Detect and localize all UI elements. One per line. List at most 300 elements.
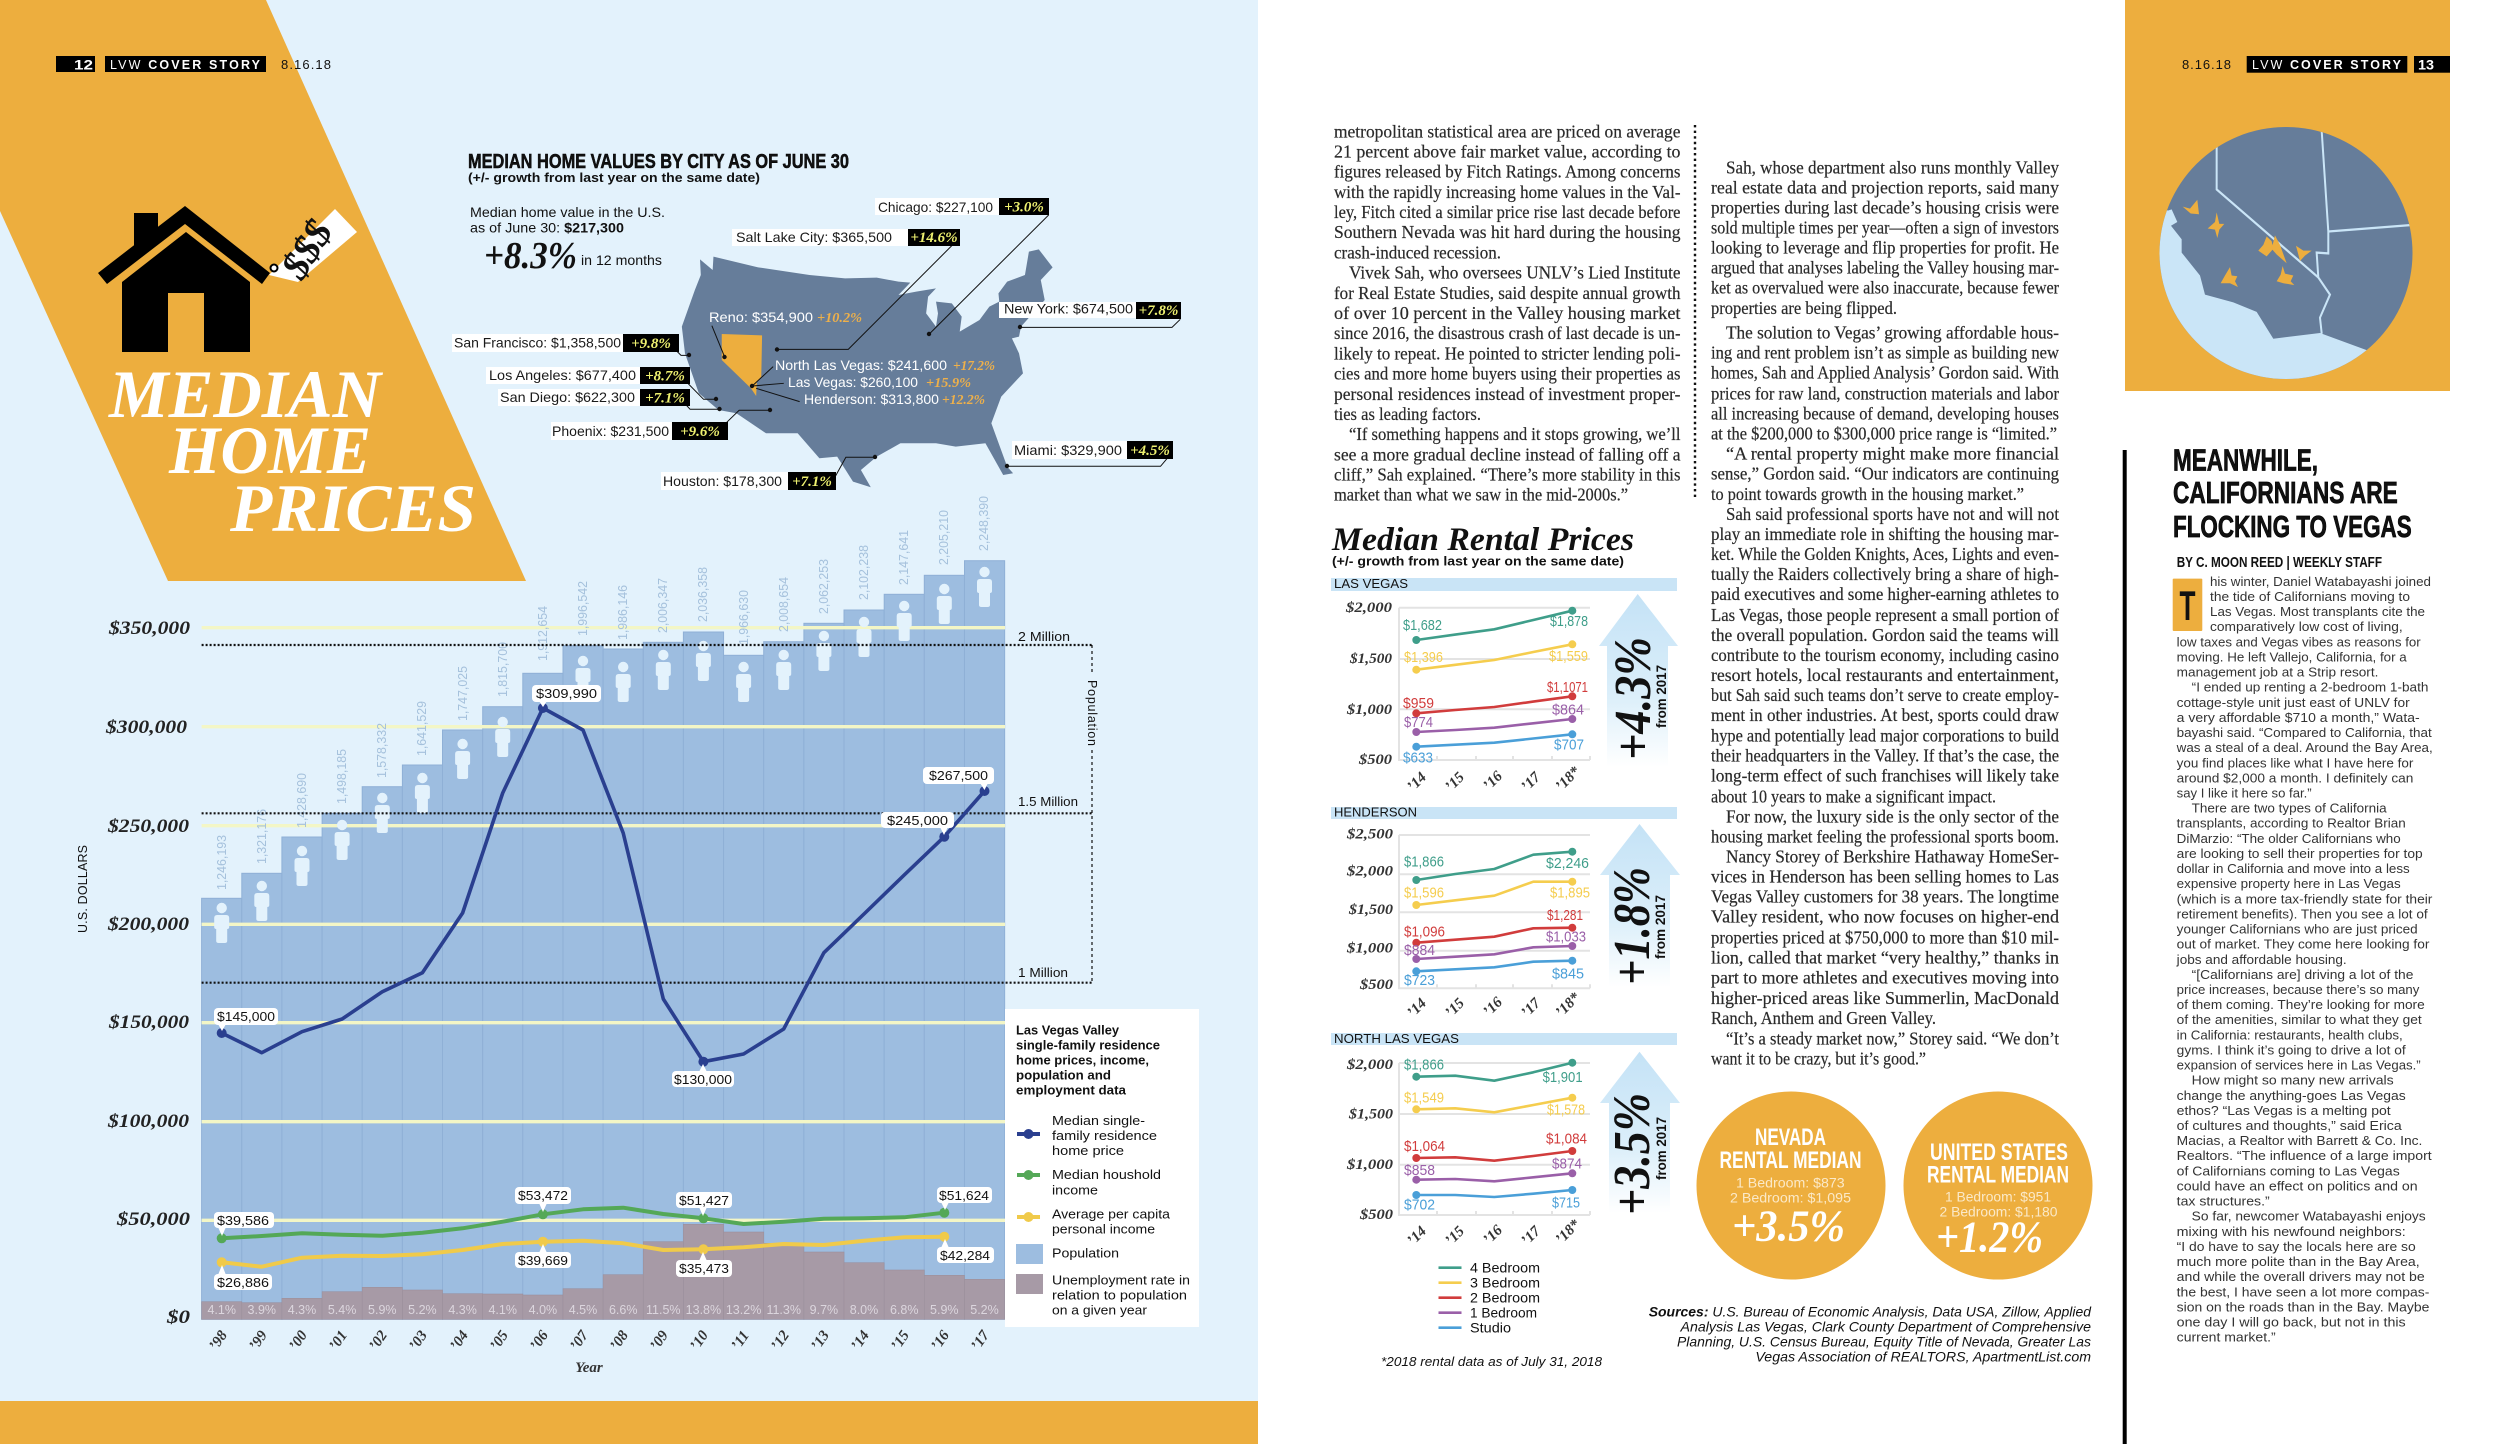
text block: sidebar article: you find places like what I have here for	[2177, 755, 2414, 770]
population values: 2,036,358	[695, 567, 710, 622]
text block: article column 2: about 10 years to make a significant impact.	[1711, 786, 1996, 806]
text block: sidebar article: “[Californians are] driving a lot of the	[2192, 967, 2413, 982]
callout: United States rental median: 1 Bedroom: $951	[1945, 1189, 2051, 1205]
population values: 2,006,347	[655, 578, 670, 633]
header: page 13 tab: 8.16.18	[2182, 57, 2231, 72]
chart: Las Vegas rentals: $864	[1552, 702, 1584, 719]
heading: Median Rental Prices: (+/- growth from last year on the same date)	[1332, 555, 1624, 569]
text block: sources	[1649, 1304, 2092, 1365]
chart: Las Vegas Valley home prices, income, population, unemployment	[76, 496, 1099, 1376]
callout: Nevada rental median: NEVADA	[1755, 1124, 1826, 1151]
callout: United States rental median: 2 Bedroom: $1,180	[1940, 1204, 2058, 1220]
value callouts: $245,000	[887, 813, 948, 828]
text block: US median home value: +8.3%	[484, 235, 577, 277]
text block: sidebar article: price increases, because there’s so many	[2177, 982, 2420, 997]
legend: home price chart: Median houshold	[1052, 1167, 1161, 1182]
chart: North Las Vegas rentals: NORTH LAS VEGAS	[1334, 1031, 1459, 1046]
y axis labels: $0	[166, 1307, 191, 1328]
y axis labels: $250,000	[107, 816, 190, 837]
text block: article column 2: Valley resident, who now focuses on higher-end	[1711, 907, 2059, 927]
chart: North Las Vegas rentals: $874	[1552, 1156, 1582, 1173]
text block: sidebar article: could have an effect on politics and on	[2177, 1178, 2418, 1194]
callout: Salt Lake City: Salt Lake City: $365,500	[736, 229, 892, 245]
callout: Nevada rental median: +3.5%	[1732, 1202, 1845, 1251]
chart: Las Vegas rentals: $1,559	[1549, 648, 1588, 665]
legend: home price chart: income	[1052, 1182, 1098, 1197]
legend: home price chart: family residence	[1052, 1128, 1157, 1143]
chart: Henderson rentals: $1,000	[1346, 941, 1394, 957]
unemployment percentages: 5.2%	[408, 1303, 437, 1317]
population reference lines	[202, 629, 1099, 983]
callout: Nevada rental median	[1696, 1092, 1886, 1280]
text block: article column 1: since 2016, the disastrous crash of last decade is un-	[1334, 323, 1680, 343]
value callouts: $42,284	[940, 1248, 990, 1263]
text block: article column 2: For now, the luxury side is the only sector of the	[1726, 806, 2059, 826]
chart: North Las Vegas rentals: ’15	[1442, 1223, 1468, 1249]
x axis labels: ’14	[848, 1328, 873, 1353]
legend: rental chart	[1438, 1260, 1540, 1336]
arrow: North Las Vegas growth	[1600, 1052, 1680, 1215]
text block: article column 1: cies and more home buyers using their properties as	[1334, 364, 1680, 384]
text block: sidebar article: Realtors. “The influence of a large import	[2177, 1148, 2432, 1163]
x axis labels: ’11	[729, 1328, 753, 1353]
population values: 2,205,210	[936, 510, 951, 565]
callout: New York: New York: $674,500	[1004, 300, 1133, 316]
text block: article column 2: Las Vegas, those people represent a small portion of	[1711, 605, 2059, 625]
text block: sidebar article: ethos? “Las Vegas is a melting pot	[2177, 1103, 2391, 1118]
chart: North Las Vegas rentals: $1,000	[1346, 1157, 1394, 1173]
text block: article column 1: ties as leading factors.	[1334, 404, 1481, 424]
text block: article column 2: looking to leverage and flip properties for profit. He	[1711, 237, 2059, 257]
text block: sources: Vegas Association of REALTORS, ApartmentList.com	[1755, 1349, 2091, 1365]
text block: sources: Planning, U.S. Census Bureau, Equity Title of Nevada, Greater Las	[1677, 1334, 2091, 1350]
callout: Houston: Houston: $178,300	[663, 473, 782, 489]
text block: sidebar article: comparatively low cost of living,	[2210, 619, 2403, 634]
unemployment percentages: 13.2%	[726, 1303, 761, 1317]
callout: United States rental median: RENTAL MEDIAN	[1927, 1162, 2069, 1189]
text block: sidebar article: expansion of services here in Las Vegas.”	[2177, 1058, 2421, 1073]
chart: Henderson rentals: HENDERSON	[1334, 804, 1417, 820]
chart: Henderson rentals: $1,866	[1404, 854, 1444, 871]
x axis labels: ’01	[326, 1328, 351, 1353]
arrow: Las Vegas growth: from 2017	[1653, 665, 1669, 728]
text block: article column 2: lion, called that market “very healthy,” thanks in	[1711, 947, 2059, 967]
unemployment percentages: 4.3%	[288, 1303, 316, 1317]
icon: house with price tag	[98, 206, 357, 352]
unemployment percentages: 6.8%	[890, 1303, 918, 1317]
unemployment percentages: 11.3%	[766, 1303, 801, 1317]
chart: Henderson rentals: $1,096	[1404, 924, 1445, 941]
x axis labels: ’07	[567, 1328, 592, 1353]
x axis labels: ’16	[928, 1328, 953, 1353]
chart: North Las Vegas rentals: $500	[1359, 1207, 1394, 1223]
text block: sidebar article: “I ended up renting a 2-bedroom 1-bath	[2192, 680, 2428, 695]
text block: article column 2: Nancy Storey of Berkshire Hathaway HomeSer-	[1726, 846, 2059, 866]
person icons	[214, 567, 992, 943]
labels: Nevada cities: +12.2%	[942, 393, 985, 408]
chart: Las Vegas rentals: ’16	[1480, 768, 1506, 794]
x axis labels: ’05	[487, 1328, 512, 1353]
text block: sidebar article: a very affordable $710 a month,” Wata-	[2177, 710, 2420, 725]
chart: North Las Vegas rentals: ’16	[1480, 1222, 1506, 1248]
chart: North Las Vegas rentals: $715	[1552, 1194, 1580, 1211]
text block: article column 2: part to more athletes and executives moving into	[1711, 968, 2059, 988]
chart: North Las Vegas rentals: ’18*	[1553, 1216, 1584, 1248]
panel: orange map block	[2125, 0, 2450, 391]
population values: 2,248,390	[976, 496, 991, 551]
x axis labels: ’02	[366, 1328, 391, 1353]
arrow: Las Vegas growth: +4.3%	[1605, 637, 1662, 760]
text block: US median home value	[470, 204, 665, 277]
icon: house with price tag: $$$	[271, 211, 342, 287]
text block: article column 1: “If something happens and it stops growing, we’ll	[1349, 424, 1680, 444]
text block: article column 2: homes, Sah and Applied Analysis’ Gordon said. With	[1711, 362, 2059, 382]
arrow: North Las Vegas growth: +3.5%	[1604, 1093, 1661, 1215]
text block: article column 2: all increasing because of demand, developing houses	[1711, 403, 2059, 423]
text block: article column 2: ket as overvalued were also inaccurate, because fewer	[1711, 277, 2059, 297]
legend: home price chart: Las Vegas Valley	[1016, 1022, 1120, 1037]
y axis labels: $200,000	[107, 914, 190, 935]
unemployment percentages: 8.0%	[850, 1303, 878, 1317]
unemployment percentages: 13.8%	[686, 1303, 721, 1317]
text block: article column 1: Southern Nevada was hit hard during the housing	[1334, 222, 1680, 242]
text block: sidebar article: in California: restaurants, health clubs,	[2177, 1027, 2403, 1042]
callout: Chicago: Chicago: $227,100	[878, 199, 993, 215]
text block: article column 2: but Sah said such teams don’t serve to create employ-	[1711, 685, 2059, 705]
population values	[214, 496, 991, 890]
unemployment percentages	[207, 1303, 999, 1317]
y axis labels: $300,000	[105, 717, 188, 738]
callout: New York: +7.8%	[1139, 303, 1178, 319]
chart: Henderson rentals: $1,500	[1348, 902, 1394, 918]
text block: article column 2: ment in other industries. At best, sports could draw	[1711, 705, 2059, 725]
callout: San Francisco: +9.8%	[631, 336, 671, 352]
value callouts	[214, 685, 994, 1290]
x axis labels: ’12	[768, 1328, 793, 1353]
text block: sidebar article: retirement benefits). Then you see a lot of	[2177, 906, 2428, 921]
value callouts: $53,472	[518, 1188, 568, 1203]
text block: sidebar article: dollar in California and move into a less	[2177, 861, 2410, 876]
unemployment percentages: 5.4%	[328, 1303, 356, 1317]
text block: sidebar article: are looking to sell their properties for top	[2177, 846, 2423, 861]
legend: home price chart	[1005, 1009, 1199, 1327]
legend: home price chart: employment data	[1016, 1082, 1127, 1097]
x axis labels: ’10	[687, 1328, 712, 1353]
population reference lines: Population	[1085, 680, 1099, 746]
chart: Las Vegas rentals: ’18*	[1553, 763, 1584, 795]
text block: sidebar article: of cultures and thoughts,” said Erica	[2177, 1118, 2403, 1133]
text block: sidebar article: There are two types of California	[2192, 801, 2387, 816]
callout: San Francisco	[452, 334, 679, 352]
population bars	[202, 561, 1005, 1319]
value callouts: $39,586	[217, 1213, 269, 1228]
text block: article column 2: their headquarters in the Valley. If that’s the case, the	[1711, 746, 2059, 766]
population values: 1,986,146	[615, 585, 630, 640]
callout: Los Angeles	[486, 367, 690, 384]
chart: North Las Vegas rentals: $702	[1404, 1196, 1435, 1213]
text block: sidebar article: (which is a more tax-friendly state for their	[2177, 891, 2433, 906]
text block: US median home value: Median home value in the U.S.	[470, 204, 665, 220]
arrow: Henderson growth	[1600, 824, 1680, 987]
chart: Las Vegas rentals: ’17	[1518, 769, 1544, 795]
population values: 2,008,654	[776, 577, 791, 632]
header: page 13 tab: 13	[2418, 56, 2434, 72]
text block: sidebar article: How might so many new arrivals	[2192, 1073, 2394, 1088]
population values: 1,428,690	[294, 773, 309, 828]
text block: article column 1: cliff,” Sah explained. “There’s more stability in this	[1334, 464, 1680, 484]
chart: Henderson rentals: $723	[1404, 972, 1435, 989]
chart: Las Vegas rentals: $1,1071	[1547, 679, 1588, 696]
chart: Henderson rentals: ’14	[1404, 995, 1430, 1021]
value callouts: $309,990	[536, 686, 597, 701]
footnote: rental data date: *2018 rental data as of July 31, 2018	[1381, 1354, 1603, 1369]
unemployment percentages: 4.3%	[448, 1303, 477, 1317]
x axis labels: ’99	[246, 1328, 271, 1353]
chart: North Las Vegas rentals: $2,000	[1346, 1057, 1394, 1073]
heading: median home values by city: (+/- growth from last year on the same date)	[468, 171, 760, 185]
legend: home price chart: population and	[1016, 1067, 1111, 1082]
population values: 1,966,630	[736, 590, 751, 645]
y axis labels	[76, 618, 191, 1328]
x axis labels: Year	[575, 1360, 603, 1376]
value callouts: $145,000	[217, 1009, 275, 1024]
line: median household income	[217, 1208, 949, 1243]
unemployment percentages: 5.9%	[368, 1303, 397, 1317]
labels: Nevada cities: Las Vegas: $260,100	[788, 374, 918, 390]
text block: sidebar article: and while the overall drivers may not be	[2177, 1269, 2425, 1284]
text block: article column 1: ley, Fitch cited a similar price rise last decade before	[1334, 202, 1681, 222]
text block: article column 1: for Real Estate Studies, said despite annual growth	[1334, 283, 1680, 303]
text block: article column 1: personal residences instead of investment proper-	[1334, 384, 1680, 404]
title: Median Home Prices: MEDIAN	[108, 356, 384, 432]
text block: article column 2: to point towards growth in the housing market.”	[1711, 484, 2024, 504]
value callouts: $130,000	[674, 1072, 732, 1087]
value callouts: $35,473	[679, 1261, 729, 1276]
text block: sidebar article: mixing with his newfound neighbors:	[2177, 1224, 2406, 1239]
chart: North Las Vegas rentals: $1,064	[1404, 1138, 1445, 1155]
text block: sidebar article: around $2,000 a month. I definitely can	[2177, 770, 2413, 785]
text block: sidebar article: of the amenities, similar to what they get	[2177, 1012, 2422, 1027]
text block: article column 2: contribute to the tourism economy, including casino	[1711, 645, 2059, 665]
text block: sidebar article: Las Vegas. Most transplants cite the	[2210, 604, 2425, 619]
callout: Phoenix	[551, 422, 728, 440]
panel: bottom orange band	[0, 1401, 1258, 1444]
callout: United States rental median: +1.2%	[1936, 1213, 2043, 1262]
population values: 1,747,025	[455, 666, 470, 721]
text block: article column 2: ket. While the Golden Knights, Aces, Lights and even-	[1711, 544, 2059, 564]
callout: Phoenix: +9.6%	[680, 424, 720, 440]
title: Median Home Prices: PRICES	[229, 470, 476, 546]
text block: article column 1: of over 10 percent in the Valley housing market	[1334, 303, 1680, 323]
labels: Nevada cities: +10.2%	[817, 311, 862, 326]
header: page 12 tab: 12	[74, 56, 93, 72]
decorative side rule	[2123, 450, 2127, 1444]
chart: Henderson rentals: $2,000	[1346, 863, 1394, 879]
header: page 12 tab: 8.16.18	[281, 57, 331, 72]
population values: 1,321,176	[254, 809, 269, 864]
text block: article column 2: sense,” Gordon said. “Our indicators are continuing	[1711, 463, 2059, 483]
text block: article column 1: likely to repeat. He pointed to stricter lending poli-	[1334, 343, 1680, 363]
text block: article column 1: crash-induced recession.	[1334, 242, 1501, 262]
chart: Henderson rentals: $500	[1359, 977, 1394, 993]
legend: home price chart: on a given year	[1052, 1302, 1148, 1317]
chart: Las Vegas rentals: $1,878	[1550, 613, 1588, 630]
y axis labels: $350,000	[108, 618, 191, 639]
legend: rental chart: 2 Bedroom	[1470, 1290, 1540, 1306]
text block: article column 1: figures released by Fitch Ratings. Among concerns	[1334, 162, 1680, 182]
chart: North Las Vegas rentals: $1,500	[1348, 1106, 1394, 1122]
text block: article column 1: see a more gradual decline instead of falling off a	[1334, 444, 1680, 464]
labels: Nevada cities: Reno: $354,900	[709, 309, 813, 325]
chart: Henderson rentals: $1,596	[1404, 885, 1444, 902]
x axis labels: ’03	[406, 1328, 431, 1353]
text block: article column 2: the overall population. Gordon said the teams will	[1711, 625, 2059, 645]
chart: North Las Vegas rentals: $1,578	[1547, 1101, 1585, 1118]
x axis labels: ’08	[607, 1328, 632, 1353]
text block: sidebar article: sion on the roads than in the Bay. Maybe	[2177, 1299, 2429, 1314]
callout: Houston	[661, 472, 836, 490]
callout: Chicago: +3.0%	[1004, 200, 1044, 216]
text block: article column 2: “It’s a steady market now,” Storey said. “We don’t	[1726, 1028, 2059, 1048]
value callouts: $51,427	[679, 1193, 729, 1208]
chart: Las Vegas rentals: $774	[1404, 714, 1433, 731]
text block: sidebar article: DiMarzio: “The older Californians who	[2177, 831, 2401, 846]
chart: Henderson rentals: ’17	[1518, 995, 1544, 1021]
legend: rental chart: Studio	[1470, 1320, 1511, 1336]
text block: article column 2: vices in Henderson has been selling homes to Las	[1711, 867, 2059, 887]
value callouts: $51,624	[939, 1188, 989, 1203]
text block: sources: Sources: U.S. Bureau of Economic Analysis, Data USA, Zillow, Applied	[1649, 1304, 2092, 1320]
chart: Henderson rentals: ’18*	[1553, 989, 1584, 1021]
text block: article column 1: with the rapidly increasing home values in the Val-	[1334, 182, 1681, 202]
text block: sidebar article: say I like it here so far.”	[2177, 786, 2312, 800]
callout: Salt Lake City: +14.6%	[910, 230, 958, 246]
chart: North Las Vegas rentals: $1,549	[1404, 1089, 1444, 1106]
heading: Meanwhile Californians: FLOCKING TO VEGAS	[2173, 509, 2412, 544]
text block: sidebar article: one day I will go back, but not in this	[2177, 1314, 2406, 1330]
text block: sidebar article: of Californians coming to Las Vegas	[2177, 1163, 2400, 1178]
text block: article column 1: Vivek Sah, who oversees UNLV’s Lied Institute	[1349, 263, 1681, 283]
unemployment percentages: 4.1%	[207, 1303, 236, 1317]
text block: article column 2: housing market feeling the professional sports boom.	[1711, 826, 2059, 846]
map: California to Nevada with birds	[2160, 127, 2412, 379]
icon: drop cap T	[2173, 579, 2202, 631]
x axis labels: ’04	[447, 1328, 472, 1353]
text block: sidebar article: jobs and affordable housing.	[2176, 952, 2347, 967]
y axis labels: $100,000	[107, 1111, 190, 1132]
chart: North Las Vegas rentals: ’17	[1518, 1223, 1544, 1249]
y axis labels: U.S. DOLLARS	[76, 845, 90, 933]
chart: Las Vegas rentals: ’15	[1442, 769, 1468, 795]
text block: US median home value: as of June 30: $217,300	[470, 220, 624, 236]
chart: Henderson rentals: $845	[1552, 965, 1584, 982]
legend: rental chart: 3 Bedroom	[1470, 1274, 1540, 1290]
chart: Las Vegas rentals	[1331, 576, 1678, 795]
text block: article column 2: resort hotels, local restaurants and entertainment,	[1711, 665, 2059, 685]
unemployment percentages: 6.6%	[609, 1303, 637, 1317]
callout: San Diego: San Diego: $622,300	[500, 389, 635, 405]
population reference lines: 1 Million	[1018, 965, 1068, 980]
callout: Miami: Miami: $329,900	[1014, 442, 1122, 458]
callout: Nevada rental median: 1 Bedroom: $873	[1736, 1175, 1845, 1191]
population reference lines: 1.5 Million	[1018, 794, 1078, 809]
text block: sidebar article: much more polite than in the Bay Area,	[2177, 1254, 2420, 1269]
arrow: Las Vegas growth	[1599, 594, 1678, 767]
x axis labels: ’00	[286, 1328, 311, 1353]
labels: Nevada cities: North Las Vegas: $241,600	[775, 357, 947, 373]
text block: sidebar article: So far, newcomer Watabayashi enjoys	[2192, 1209, 2426, 1224]
callout: Miami	[1012, 441, 1173, 459]
text block: sidebar article: bayashi said. “Compared to California, that	[2177, 725, 2432, 740]
chart: Henderson rentals: $1,895	[1550, 885, 1590, 902]
arrow: Henderson growth: +1.8%	[1604, 867, 1661, 985]
heading: Median Rental Prices: Median Rental Prices	[1331, 522, 1634, 558]
text block: article column 2: hype and potentially lead major corporations to build	[1711, 726, 2059, 746]
legend: home price chart: Unemployment rate in	[1052, 1272, 1190, 1287]
chart: Las Vegas rentals: $633	[1403, 750, 1433, 767]
callout: Chicago	[875, 198, 1049, 216]
text block: article column 2: Ranch, Anthem and Green Valley.	[1711, 1008, 1936, 1028]
map: United States home values	[452, 198, 1181, 490]
population values: 1,912,654	[535, 606, 550, 661]
x axis labels: ’13	[808, 1328, 833, 1353]
unemployment percentages: 11.5%	[646, 1303, 681, 1317]
text block: sidebar article: current market.”	[2177, 1330, 2276, 1345]
population values: 2,062,253	[816, 559, 831, 614]
chart: Henderson rentals: ’16	[1480, 994, 1506, 1020]
chart: Las Vegas rentals: $1,000	[1346, 702, 1393, 718]
chart: North Las Vegas rentals: $1,866	[1404, 1056, 1444, 1073]
text block: sidebar article	[2176, 574, 2433, 1345]
text block: article column 2: Vegas Valley customers for 38 years. The longtime	[1711, 887, 2059, 907]
callout: New York	[999, 300, 1181, 319]
callout: Nevada rental median: RENTAL MEDIAN	[1720, 1147, 1862, 1174]
chart: Henderson rentals	[1331, 804, 1680, 1021]
panel: left page background	[0, 0, 1258, 1444]
text block: article column 2: Sah said professional sports have not and will not	[1726, 504, 2059, 524]
heading: median home values by city	[468, 151, 849, 185]
chart: Las Vegas rentals: $959	[1403, 695, 1434, 712]
heading: Meanwhile Californians	[2173, 443, 2412, 544]
text block: sidebar article: the best, I have seen a lot more compas-	[2177, 1284, 2429, 1299]
population values: 1,246,193	[214, 835, 229, 890]
chart: Las Vegas rentals: $1,500	[1349, 651, 1393, 667]
legend: home price chart: home price	[1052, 1143, 1124, 1158]
arrow: North Las Vegas growth: from 2017	[1653, 1117, 1669, 1180]
text block: article column 2: want it to be crazy, but it’s good.”	[1711, 1048, 1926, 1068]
labels: Nevada cities: +15.9%	[926, 376, 971, 391]
text block: article column 2: properties priced at $750,000 to more than $10 mil-	[1711, 927, 2059, 947]
x axis labels: ’17	[968, 1328, 993, 1353]
line: median home price	[217, 703, 989, 1067]
heading: Meanwhile Californians: MEANWHILE,	[2173, 443, 2318, 478]
text block: sidebar article: younger Californians who are just priced	[2177, 922, 2418, 936]
labels: Nevada cities: +17.2%	[953, 359, 995, 374]
chart: Henderson rentals: $2,246	[1546, 855, 1589, 872]
callout: Miami: +4.5%	[1130, 443, 1170, 459]
chart: Las Vegas rentals: $707	[1554, 736, 1584, 753]
text block: article column 2: The solution to Vegas’ growing affordable hous-	[1726, 322, 2059, 342]
value callouts: $267,500	[929, 768, 988, 783]
chart: Las Vegas rentals: $500	[1358, 752, 1393, 768]
callout: Los Angeles: Los Angeles: $677,400	[489, 367, 636, 383]
text block: sidebar article: was a steal of a deal. Around the Bay Area,	[2176, 740, 2433, 755]
header: page 12 tab	[56, 56, 331, 72]
text block: article column 2: higher-priced areas like Summerlin, MacDonald	[1711, 988, 2059, 1008]
value callouts: $39,669	[518, 1253, 568, 1268]
population values: 1,996,542	[575, 581, 590, 636]
legend: home price chart: Median single-	[1052, 1113, 1145, 1128]
